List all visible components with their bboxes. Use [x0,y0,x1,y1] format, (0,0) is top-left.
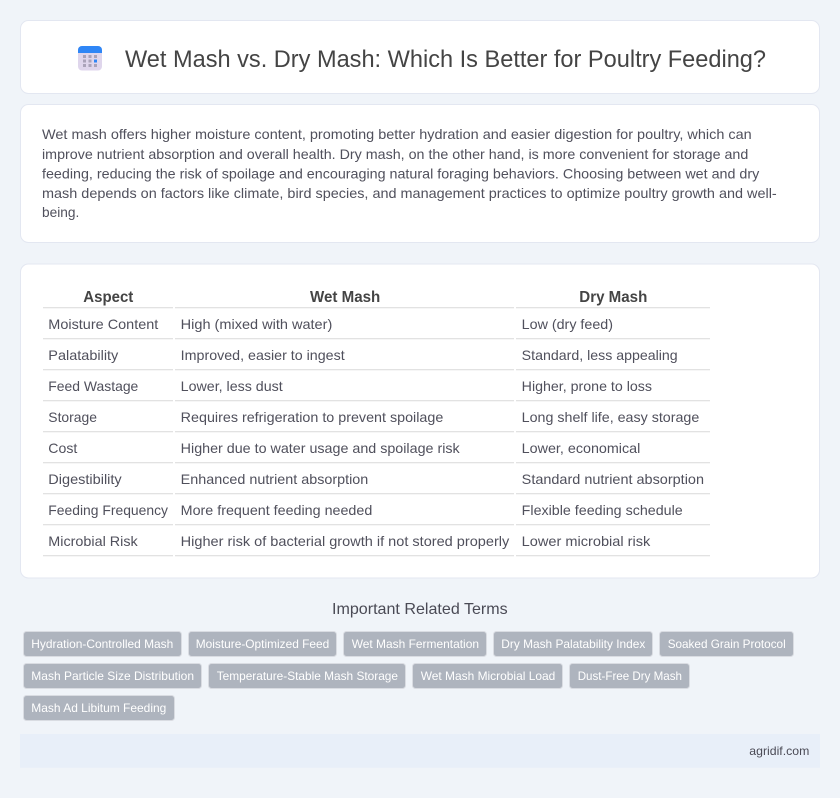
table row: microbial risk [48,533,651,549]
table row: digestibility: Enhanced nutrient absorption [181,471,368,487]
table row: cost: Higher due to water usage and spoilage risk [181,440,461,456]
table row: storage: Long shelf life, easy storage [522,409,700,425]
title: Wet Mash vs. Dry Mash: Which Is Better for Poultry Feeding? [125,46,766,73]
table header row: Wet Mash [310,289,380,306]
table header row: Aspect [83,289,134,306]
table row: microbial risk: Microbial Risk [48,533,139,549]
text block: summary paragraph: being. [42,204,79,220]
table row: moisture content: Moisture Content [48,316,158,332]
panel: related term tags: Moisture-Optimized Feed [196,637,329,651]
heading: important related terms: Important Related Terms [332,601,508,618]
table row: digestibility [48,471,704,487]
panel: related term tags: Mash Particle Size Distribution [31,669,194,683]
panel: comparison table [20,264,820,578]
table header row: Dry Mash [579,289,647,306]
table row: palatability: Improved, easier to ingest [181,347,345,363]
table row: cost: Cost [48,440,77,456]
table row: feed wastage [48,378,652,394]
panel: related term tags: Wet Mash Fermentation [352,637,479,651]
table row: microbial risk: Lower microbial risk [522,533,651,549]
table row: storage: Requires refrigeration to prevent spoilage [181,409,444,425]
table row: feed wastage: Higher, prone to loss [522,378,652,394]
table row: storage [48,409,700,425]
panel: related term tags: Dust-Free Dry Mash [578,669,682,683]
table row: feeding frequency: Feeding Frequency [48,502,168,518]
icon: calendar [78,46,102,70]
table row: palatability [48,347,678,363]
table row: palatability: Palatability [48,347,118,363]
text block: summary paragraph: feeding, reducing the risk of spoilage and encouraging natural foraging behaviors. Choosing between wet and dry [42,165,759,181]
table row: palatability: Standard, less appealing [522,347,678,363]
table row: moisture content: Low (dry feed) [522,316,613,332]
panel: related term tags [24,632,794,720]
panel: title header [20,20,820,94]
text block: summary paragraph: improve nutrient absorption and overall health. Dry mash, on the other hand, is more convenient for storage and [42,146,748,162]
table row: moisture content: High (mixed with water) [181,316,332,332]
text block: summary paragraph [42,126,777,220]
table row: digestibility: Standard nutrient absorption [522,471,704,487]
table row: feed wastage: Lower, less dust [181,378,283,394]
panel: introduction text [20,104,820,242]
panel: related term tags: Wet Mash Microbial Load [421,669,555,683]
panel: related term tags: Soaked Grain Protocol [668,637,786,651]
panel: related term tags: Hydration-Controlled Mash [31,637,173,651]
table row: digestibility: Digestibility [48,471,122,487]
table row: microbial risk: Higher risk of bacterial growth if not stored properly [181,533,509,549]
text block: summary paragraph: mash depends on factors like climate, bird species, and management practices to optimize poultry growth and well- [42,185,777,201]
table row: feeding frequency: Flexible feeding schedule [522,502,683,518]
footer source text: agridif.com [749,744,809,758]
footer bar [20,734,820,768]
text block: summary paragraph: Wet mash offers higher moisture content, promoting better hydration and easier digestion for poultry, which can [42,126,752,142]
panel: related term tags: Temperature-Stable Mash Storage [217,669,398,683]
table row: feeding frequency: More frequent feeding needed [181,502,372,518]
table row: feeding frequency [48,502,683,518]
table row: cost: Lower, economical [522,440,640,456]
table row: storage: Storage [48,409,97,425]
panel: related term tags: Dry Mash Palatability Index [501,637,645,651]
table row: feed wastage: Feed Wastage [48,378,139,394]
table row: moisture content [48,316,613,332]
panel: related term tags: Mash Ad Libitum Feeding [31,701,166,715]
table header row [83,289,647,306]
table row: cost [48,440,640,456]
